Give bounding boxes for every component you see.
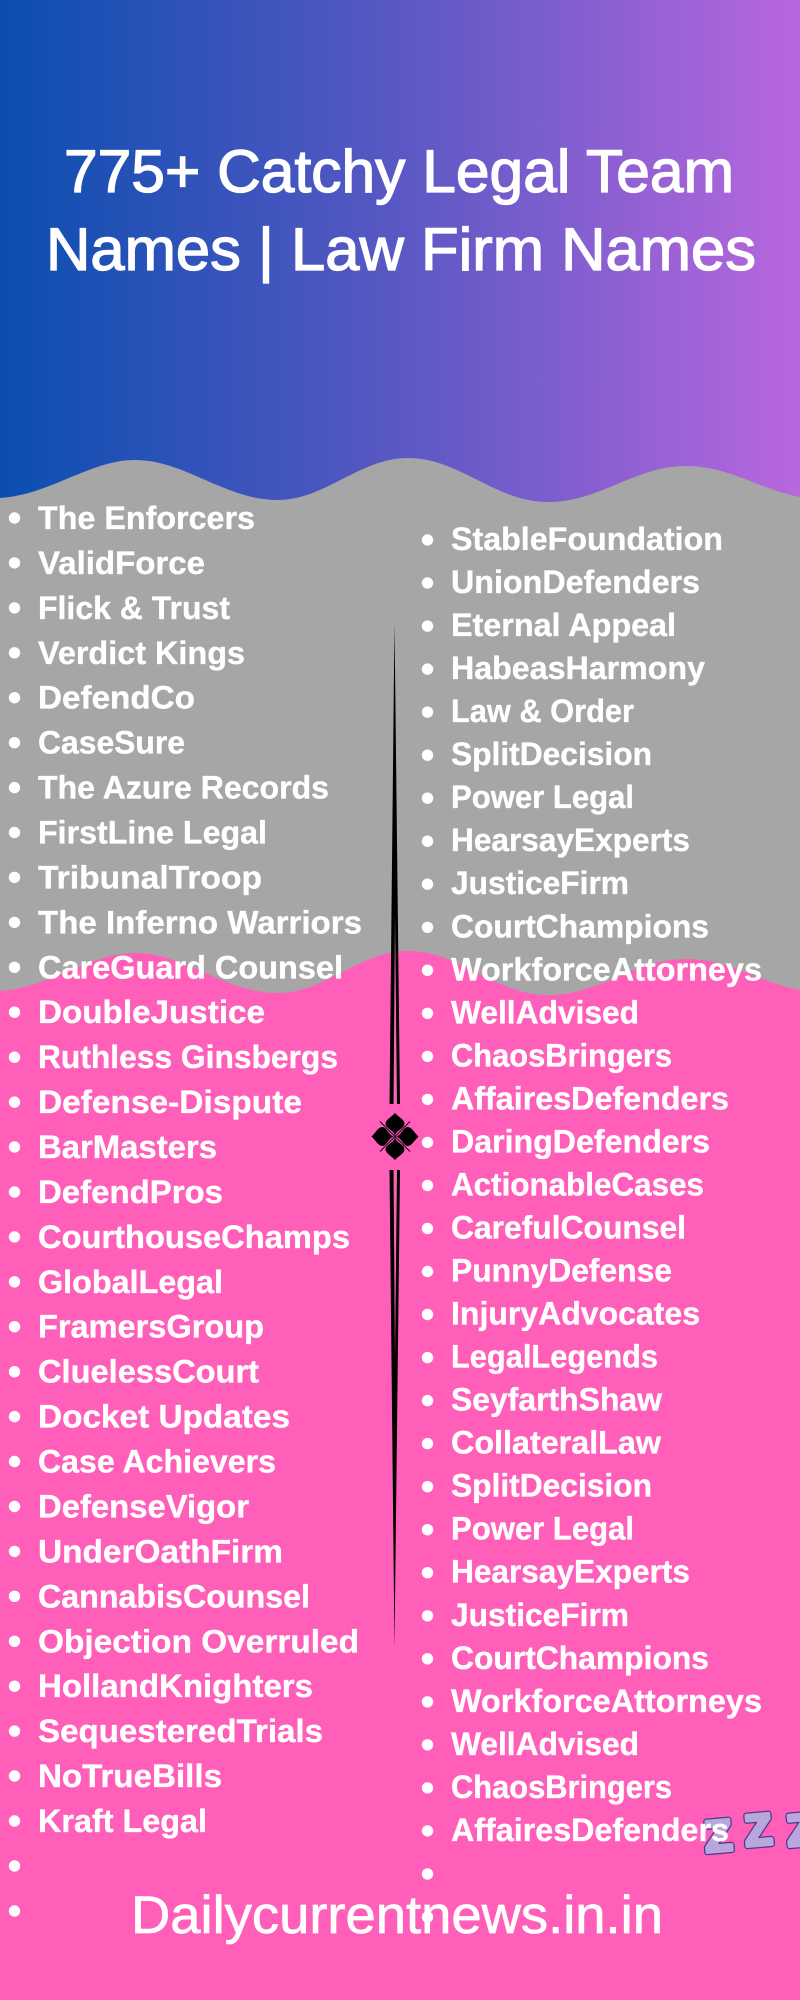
right column list: DaringDefenders	[451, 1123, 710, 1159]
left column list: BarMasters	[38, 1129, 217, 1165]
left column list: CourthouseChamps	[38, 1219, 350, 1255]
icon: divider ornament	[372, 1113, 418, 1160]
right column list: Eternal Appeal	[451, 607, 676, 643]
title: 775+ Catchy Legal Team	[64, 138, 734, 205]
right column list: WorkforceAttorneys	[451, 1683, 762, 1719]
left column list: The Inferno Warriors	[38, 904, 362, 940]
right column list: SplitDecision	[451, 1468, 652, 1504]
left column list	[9, 500, 362, 1917]
grey wave panel	[0, 458, 800, 1100]
right column list: SeyfarthShaw	[451, 1382, 663, 1418]
left column list: ValidForce	[38, 545, 205, 581]
left column list: DefendCo	[38, 680, 195, 716]
left column list: DefenseVigor	[38, 1488, 249, 1524]
icon: sleepy Z letters: Z	[743, 1805, 774, 1856]
right column list: AffairesDefenders	[451, 1812, 729, 1848]
right column list: HearsayExperts	[451, 1554, 690, 1590]
right column list: JusticeFirm	[451, 1597, 629, 1633]
right column list: JusticeFirm	[451, 865, 629, 901]
right column list: InjuryAdvocates	[451, 1296, 700, 1332]
right column list: WorkforceAttorneys	[451, 951, 762, 987]
right column list: CourtChampions	[451, 908, 709, 944]
right column list: LegalLegends	[451, 1339, 658, 1375]
icon: sleepy Z letters: Z	[743, 1805, 774, 1856]
left column list: CaseSure	[38, 725, 185, 761]
icon: sleepy Z letters	[703, 1805, 800, 1862]
left column list: HollandKnighters	[38, 1668, 313, 1704]
right column list: AffairesDefenders	[451, 1080, 729, 1116]
left column list: SequesteredTrials	[38, 1713, 323, 1749]
left column list: Defense-Dispute	[38, 1084, 302, 1120]
right column list: UnionDefenders	[451, 564, 700, 600]
right column list	[422, 521, 762, 1923]
header gradient background	[0, 0, 800, 520]
right column list: CarefulCounsel	[451, 1210, 686, 1246]
right column list: SplitDecision	[451, 736, 652, 772]
icon: sleepy Z letters: Z	[703, 1811, 734, 1862]
left column list: FirstLine Legal	[38, 814, 267, 850]
title: Names | Law Firm Names	[46, 216, 756, 283]
right column list: ActionableCases	[451, 1166, 704, 1202]
left column list: The Enforcers	[38, 500, 255, 536]
right column list: WellAdvised	[451, 1726, 639, 1762]
right column list: Power Legal	[451, 1511, 634, 1547]
right column list: CourtChampions	[451, 1640, 709, 1676]
divider: upper tapered line	[390, 623, 400, 1104]
left column list: DefendPros	[38, 1174, 223, 1210]
right column list: StableFoundation	[451, 521, 723, 557]
right column list: ChaosBringers	[451, 1037, 672, 1073]
left column list: Case Achievers	[38, 1444, 276, 1480]
left column list: FramersGroup	[38, 1309, 264, 1345]
right column list: WellAdvised	[451, 994, 639, 1030]
right column list: ChaosBringers	[451, 1769, 672, 1805]
left column list: The Azure Records	[38, 770, 329, 806]
left column list: CluelessCourt	[38, 1354, 259, 1390]
pink wave panel	[0, 951, 800, 2000]
right column list: Power Legal	[451, 779, 634, 815]
left column list: CannabisCounsel	[38, 1578, 310, 1614]
right column list: HearsayExperts	[451, 822, 690, 858]
divider: lower tapered line	[390, 1170, 400, 1648]
right column list: PunnyDefense	[451, 1252, 672, 1288]
left column list: Docket Updates	[38, 1399, 290, 1435]
left column list: UnderOathFirm	[38, 1533, 283, 1569]
left column list: Kraft Legal	[38, 1803, 207, 1839]
left column list: Verdict Kings	[38, 635, 245, 671]
icon: sleepy Z letters: Z	[703, 1811, 734, 1862]
left column list: DoubleJustice	[38, 994, 265, 1030]
right column list: HabeasHarmony	[451, 650, 705, 686]
left column list: NoTrueBills	[38, 1758, 222, 1794]
footer website text: Dailycurrentnews.in.in	[131, 1886, 663, 1945]
left column list: Ruthless Ginsbergs	[38, 1039, 338, 1075]
right column list: CollateralLaw	[451, 1425, 662, 1461]
left column list: Flick & Trust	[38, 590, 230, 626]
left column list: Objection Overruled	[38, 1623, 359, 1659]
right column list: Law & Order	[451, 693, 634, 729]
left column list: CareGuard Counsel	[38, 949, 343, 985]
left column list: TribunalTroop	[38, 859, 262, 895]
left column list: GlobalLegal	[38, 1264, 223, 1300]
title	[46, 138, 756, 283]
